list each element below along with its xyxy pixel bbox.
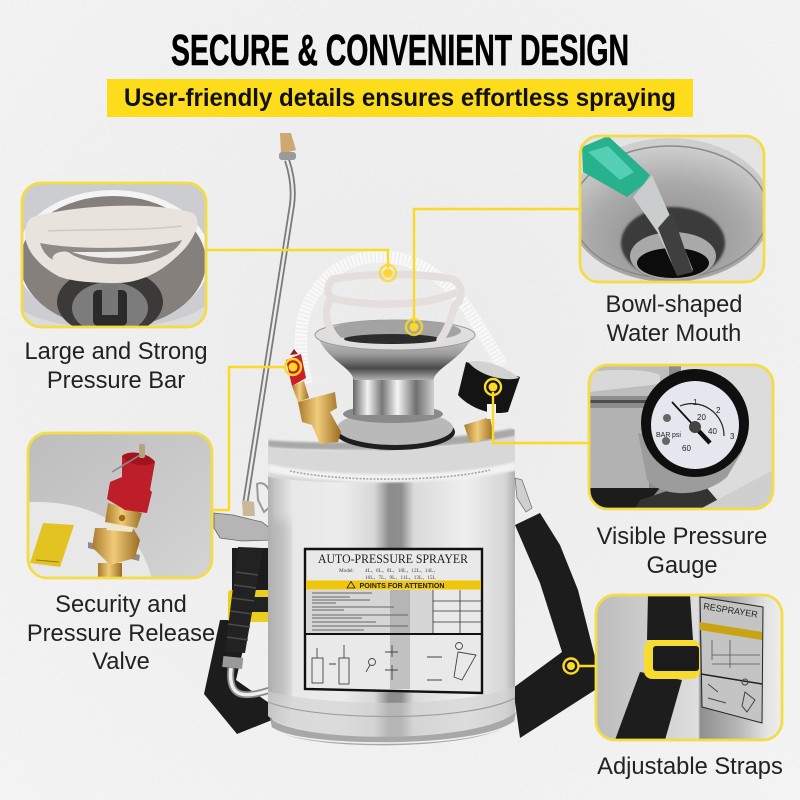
- panel: visible pressure gauge: 60: [682, 444, 691, 453]
- panel: visible pressure gauge: 1: [693, 398, 698, 407]
- label: water mouth: Bowl-shaped: [606, 292, 742, 318]
- label: release valve: Security and: [55, 592, 187, 618]
- label: adjustable straps: Adjustable Straps: [597, 754, 783, 780]
- product: pressure gauge: [458, 361, 520, 443]
- label: pressure bar: Large and Strong: [24, 339, 208, 365]
- label: release valve: Pressure Release: [27, 621, 215, 647]
- product: white mesh hose: [301, 257, 502, 385]
- product label plate: [305, 549, 482, 693]
- product label plate: 4L、6L、8L、10L、12L、14L、: [365, 568, 438, 574]
- product: pressure bar handle: [327, 274, 461, 340]
- product: red pressure release valve: [286, 349, 341, 444]
- panel: visible pressure gauge: 2: [716, 406, 721, 415]
- leader line: pressure gauge: [485, 379, 589, 443]
- product label plate: 16L、7L、9L、11L、13L、15L: [365, 575, 436, 581]
- panel: visible pressure gauge: psi: [672, 432, 681, 439]
- panel: large and strong pressure bar: [16, 183, 210, 336]
- product: tank: [262, 418, 532, 760]
- label: pressure gauge: Gauge: [646, 553, 718, 579]
- panel: visible pressure gauge: 20: [697, 413, 706, 422]
- product label plate: Model:: [339, 568, 355, 574]
- label: pressure gauge: Visible Pressure: [597, 524, 767, 550]
- panel: security and pressure release valve: [28, 433, 212, 580]
- product label plate: AUTO-PRESSURE SPRAYER: [318, 551, 468, 566]
- panel: visible pressure gauge: BAR: [656, 432, 670, 439]
- product: shoulder strap: [204, 513, 597, 738]
- panel: visible pressure gauge: [589, 365, 773, 509]
- leader line: straps: [564, 658, 596, 674]
- leader line: release valve: [212, 359, 301, 510]
- panel: bowl-shaped water mouth: [568, 136, 772, 282]
- panel: visible pressure gauge: 40: [708, 427, 717, 436]
- label: release valve: Valve: [92, 649, 150, 675]
- leader line: water mouth: [406, 209, 580, 335]
- subtitle banner: User-friendly details ensures effortless spraying: [124, 84, 676, 112]
- product: spray wand and gun: [214, 133, 296, 695]
- panel: visible pressure gauge: 3: [730, 432, 735, 441]
- label: pressure bar: Pressure Bar: [47, 368, 185, 394]
- leader line: pressure bar: [206, 250, 396, 281]
- panel: adjustable straps: RESPRAYER: [703, 601, 759, 620]
- label: water mouth: Water Mouth: [607, 321, 741, 347]
- product: bowl-shaped water mouth and neck: [315, 320, 475, 450]
- panel: adjustable straps: [596, 595, 782, 740]
- product label plate: POINTS FOR ATTENTION: [360, 583, 444, 590]
